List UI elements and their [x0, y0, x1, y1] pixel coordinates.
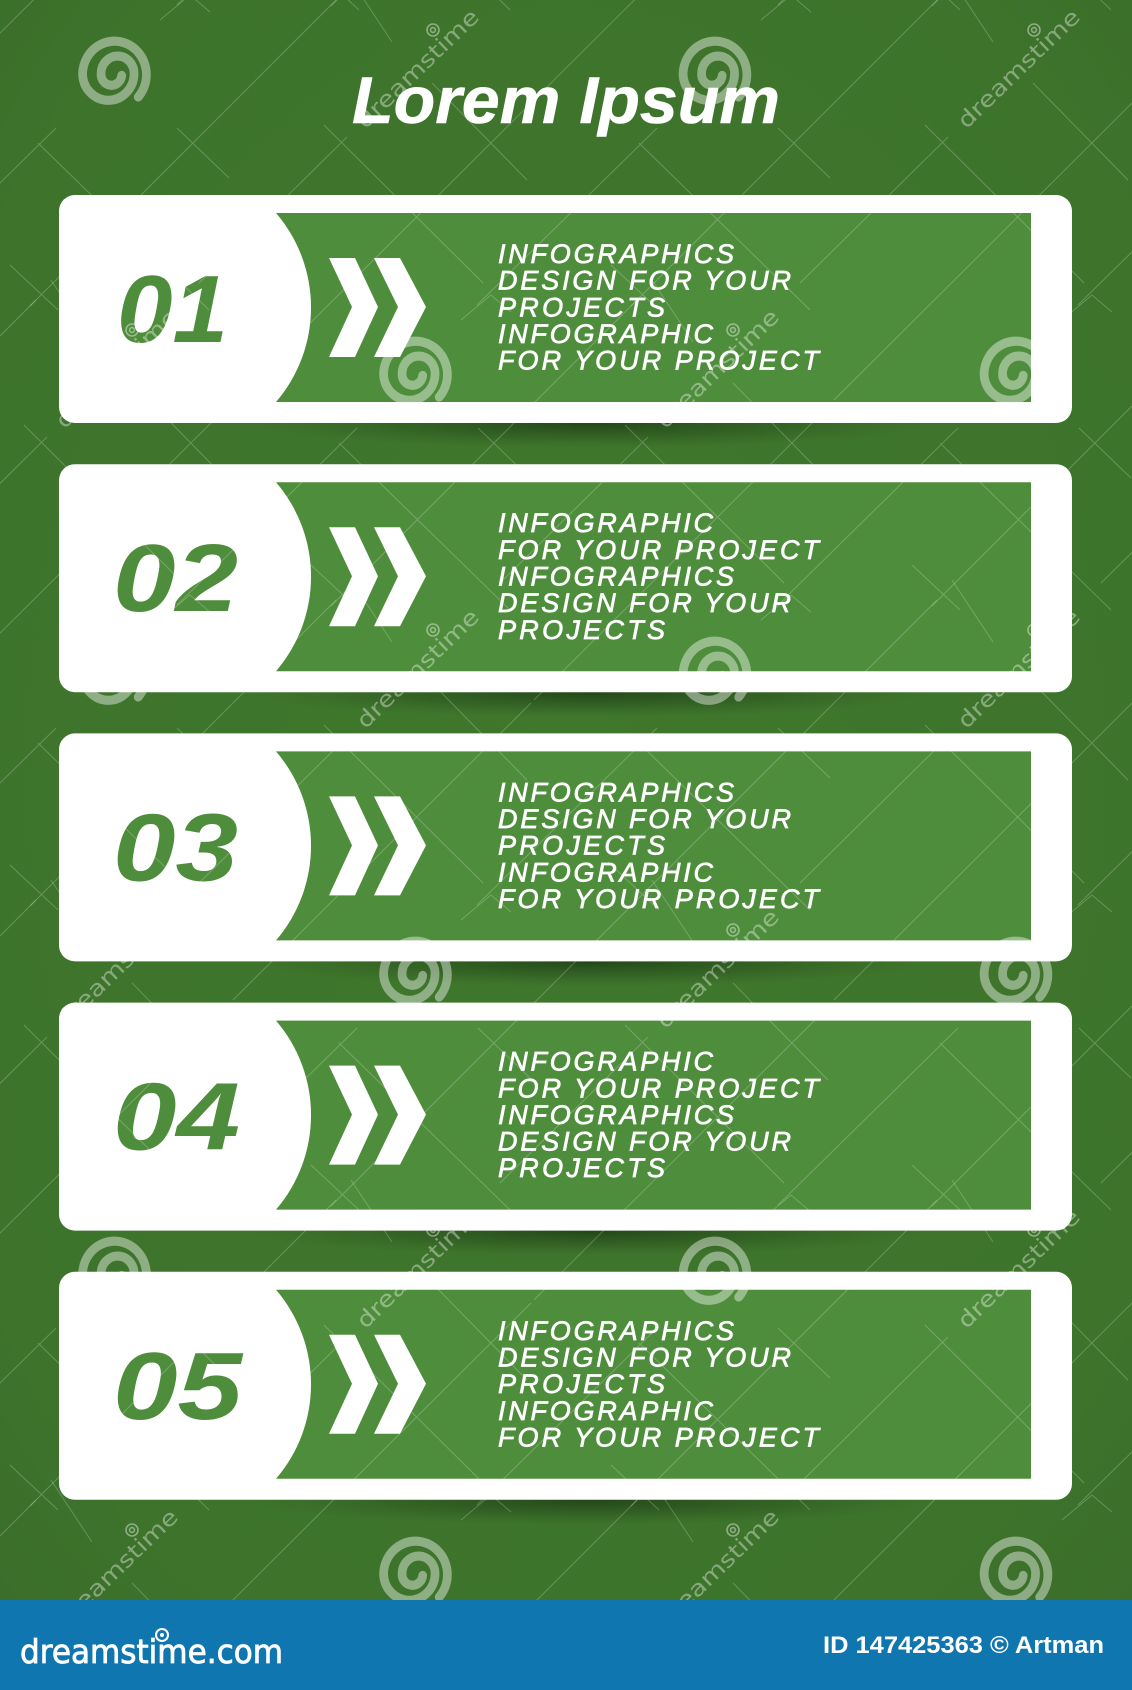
panel: step 05	[59, 1272, 1072, 1525]
text block 02: INFOGRAPHIC	[498, 508, 714, 538]
footer logo: dreamstime.com	[20, 1632, 283, 1671]
watermark overlay: dreamstime	[652, 1505, 785, 1634]
text block 03: DESIGN FOR YOUR	[498, 804, 791, 834]
text block 03: PROJECTS	[498, 831, 665, 861]
text block 01: PROJECTS	[498, 292, 665, 322]
panel: step 01	[59, 195, 1072, 448]
icon: double chevron	[329, 527, 426, 626]
image credit: ID 147425363 © Artman	[823, 1632, 1104, 1659]
text block 04: INFOGRAPHIC	[498, 1047, 714, 1077]
text block 05: DESIGN FOR YOUR	[498, 1343, 791, 1373]
watermark overlay: dreamstime	[352, 1205, 485, 1334]
text block 02: PROJECTS	[498, 615, 665, 645]
number 01: 01	[117, 256, 228, 363]
icon: double chevron	[329, 1066, 426, 1165]
icon: double chevron	[329, 258, 426, 357]
text block 01: DESIGN FOR YOUR	[498, 266, 791, 296]
watermark overlay: dreamstime	[652, 305, 785, 434]
text block 01: INFOGRAPHICS	[498, 239, 734, 269]
text block 05: INFOGRAPHICS	[498, 1316, 734, 1346]
icon: double chevron	[329, 1335, 426, 1434]
text block 04: FOR YOUR PROJECT	[498, 1073, 822, 1103]
text block 02: INFOGRAPHICS	[498, 562, 734, 592]
text block 05: INFOGRAPHIC	[498, 1396, 714, 1426]
footer bar	[0, 1600, 1132, 1690]
text block 03: FOR YOUR PROJECT	[498, 884, 822, 914]
panel: step 03	[59, 733, 1072, 986]
watermark overlay: dreamstime	[51, 1505, 184, 1634]
title: Lorem Ipsum	[352, 63, 780, 137]
number 05: 05	[113, 1333, 244, 1440]
number 04: 04	[113, 1064, 240, 1171]
panel: step 02	[59, 464, 1072, 717]
text block 03: INFOGRAPHICS	[498, 777, 734, 807]
text block 02: FOR YOUR PROJECT	[498, 535, 822, 565]
text block 05: PROJECTS	[498, 1369, 665, 1399]
text block 04: INFOGRAPHICS	[498, 1100, 734, 1130]
text block 02: DESIGN FOR YOUR	[498, 588, 791, 618]
text block 04: DESIGN FOR YOUR	[498, 1127, 791, 1157]
text block 04: PROJECTS	[498, 1153, 665, 1183]
watermark overlay: dreamstime	[51, 905, 184, 1034]
watermark overlay: dreamstime	[352, 5, 485, 134]
watermark overlay: dreamstime	[51, 305, 184, 434]
watermark overlay: dreamstime	[652, 905, 785, 1034]
panel: step 04	[59, 1003, 1072, 1256]
number 02: 02	[113, 525, 238, 632]
text block 01	[498, 239, 822, 376]
watermark overlay: dreamstime	[953, 605, 1086, 734]
number 03: 03	[113, 794, 238, 901]
text block 05: FOR YOUR PROJECT	[498, 1422, 822, 1452]
text block 03: INFOGRAPHIC	[498, 857, 714, 887]
watermark overlay: dreamstime	[352, 605, 485, 734]
watermark overlay: dreamstime	[953, 5, 1086, 134]
text block 02	[498, 508, 822, 645]
icon: double chevron	[329, 796, 426, 895]
watermark overlay: dreamstime	[953, 1205, 1086, 1334]
text block 03	[498, 777, 822, 914]
text block 01: INFOGRAPHIC	[498, 319, 714, 349]
text block 01: FOR YOUR PROJECT	[498, 346, 822, 376]
text block 04	[498, 1047, 822, 1183]
text block 05	[498, 1316, 822, 1452]
